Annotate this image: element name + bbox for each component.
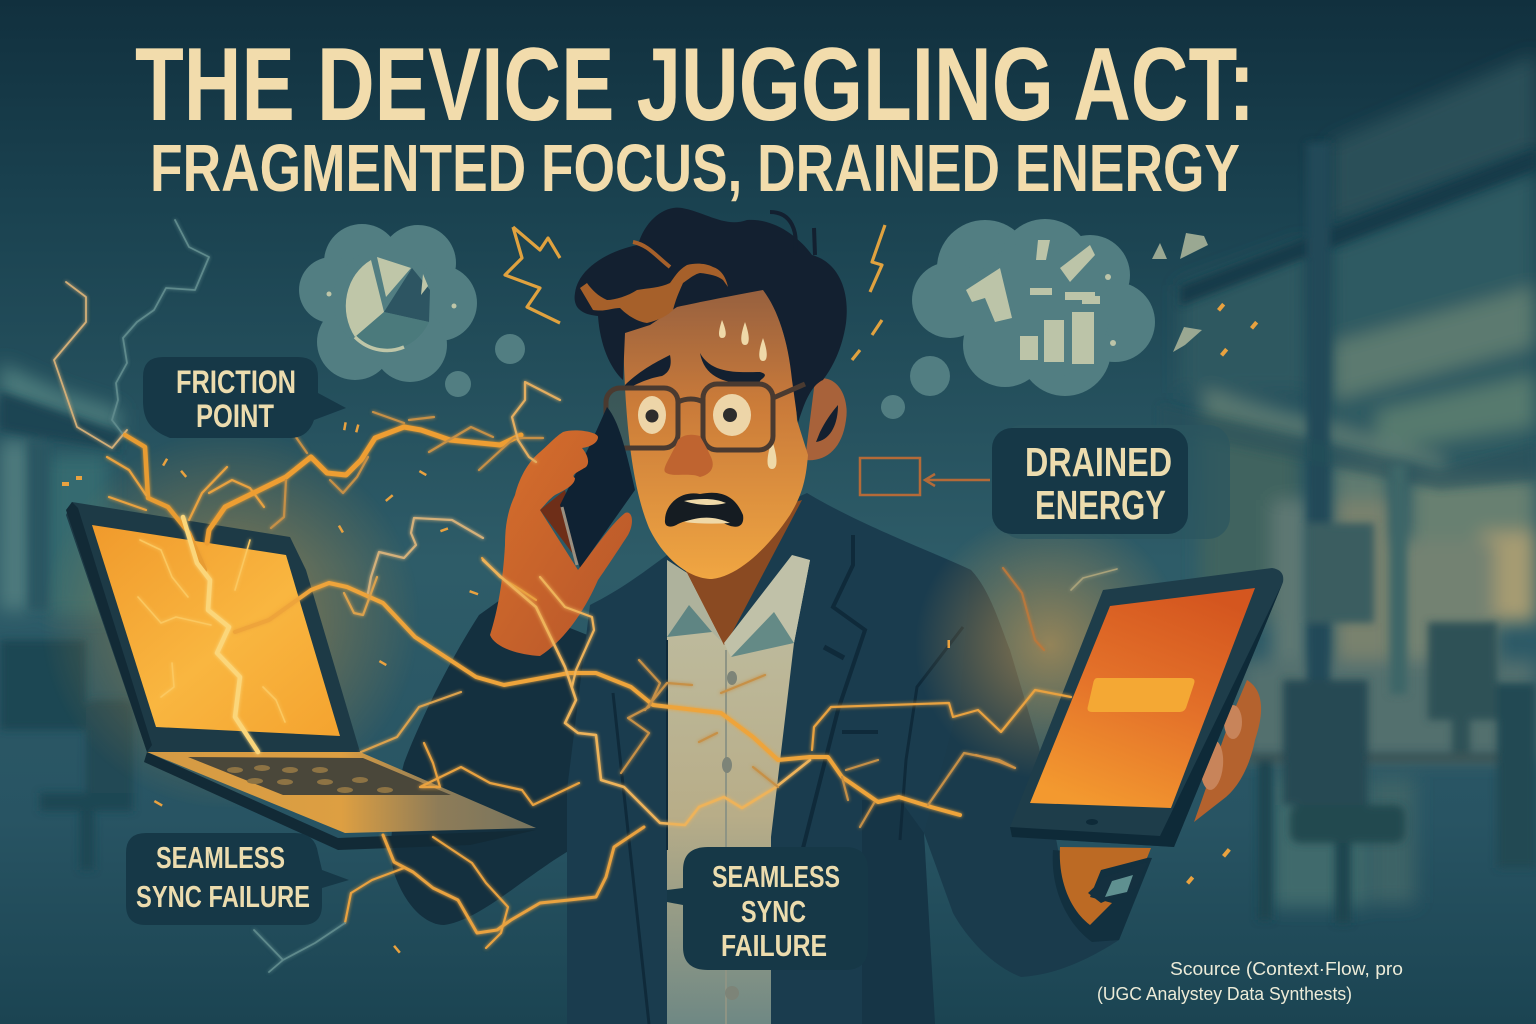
label: seamless sync failure left: SYNC FAILURE <box>136 879 310 914</box>
icon: fragmented bars <box>966 240 1116 364</box>
laptop base <box>144 752 536 850</box>
tablet <box>1010 568 1283 847</box>
eyes <box>638 394 751 436</box>
hair <box>575 208 847 423</box>
subtitle: FRAGMENTED FOCUS, DRAINED ENERGY <box>150 131 1240 206</box>
tablet screen <box>1030 588 1255 808</box>
jacket torso <box>567 493 971 1024</box>
laptop screen <box>92 525 340 736</box>
watch <box>1088 862 1147 903</box>
wrist under tablet <box>1060 847 1151 925</box>
source note <box>1097 959 1403 1004</box>
dark body band <box>862 800 935 1024</box>
nose <box>664 435 713 477</box>
label: drained energy backing <box>1000 425 1230 539</box>
tablet bar <box>1088 678 1194 712</box>
palm shadow <box>540 490 585 570</box>
collar <box>667 555 810 657</box>
laptop keyboard <box>188 757 451 795</box>
label: friction point: FRICTION <box>176 364 296 400</box>
shirt buttons <box>722 671 739 1000</box>
source note: Scource (Context·Flow, pro <box>1170 959 1403 979</box>
laptop <box>40 430 536 850</box>
glasses <box>606 384 805 450</box>
icon: drained battery with arrow <box>860 458 990 495</box>
thought bubbles right <box>881 356 950 419</box>
label: drained energy <box>992 428 1188 534</box>
thought cloud: pie chart <box>299 224 477 382</box>
doodle sparks <box>505 225 885 360</box>
ear <box>805 378 847 460</box>
phone hand <box>490 430 632 656</box>
mouth <box>665 493 743 527</box>
label: friction point <box>143 357 346 438</box>
person <box>391 208 1261 1024</box>
tablet fingers <box>1194 680 1261 822</box>
sparks <box>62 303 1258 954</box>
label: friction point: POINT <box>196 398 274 434</box>
label: drained energy: DRAINED <box>1025 439 1172 485</box>
source note: (UGC Analystey Data Synthests) <box>1097 984 1352 1004</box>
jacket details <box>613 535 963 1024</box>
laptop lid <box>66 502 360 752</box>
lightning arcs <box>54 220 1117 972</box>
label: seamless sync failure left: SEAMLESS <box>156 840 285 875</box>
label: drained energy: ENERGY <box>1035 482 1166 528</box>
tablet glow <box>915 510 1185 780</box>
shirt <box>667 560 810 1024</box>
label: seamless sync failure center: SYNC <box>741 894 806 929</box>
face <box>623 288 808 579</box>
title <box>135 27 1255 206</box>
sweat drops <box>719 320 776 469</box>
pale upper-left arcs <box>54 220 209 448</box>
label: seamless sync failure left <box>126 833 349 925</box>
thought bubbles left <box>445 334 525 397</box>
label: seamless sync failure center: SEAMLESS <box>712 859 840 894</box>
label: seamless sync failure center <box>667 847 868 970</box>
sleeve cuff under tablet <box>1053 850 1152 942</box>
eyebrows <box>625 353 765 390</box>
label: seamless sync failure center: FAILURE <box>721 928 827 963</box>
neck <box>670 500 802 648</box>
floating shards <box>1152 233 1208 352</box>
left arm sleeve <box>391 600 600 925</box>
tablet home button <box>1086 819 1098 825</box>
laptop crack <box>183 517 258 752</box>
thought cloud: fragmented charts <box>912 219 1155 396</box>
right arm sleeve <box>880 540 1150 977</box>
phone <box>560 407 635 568</box>
icon: pie chart <box>326 257 456 350</box>
